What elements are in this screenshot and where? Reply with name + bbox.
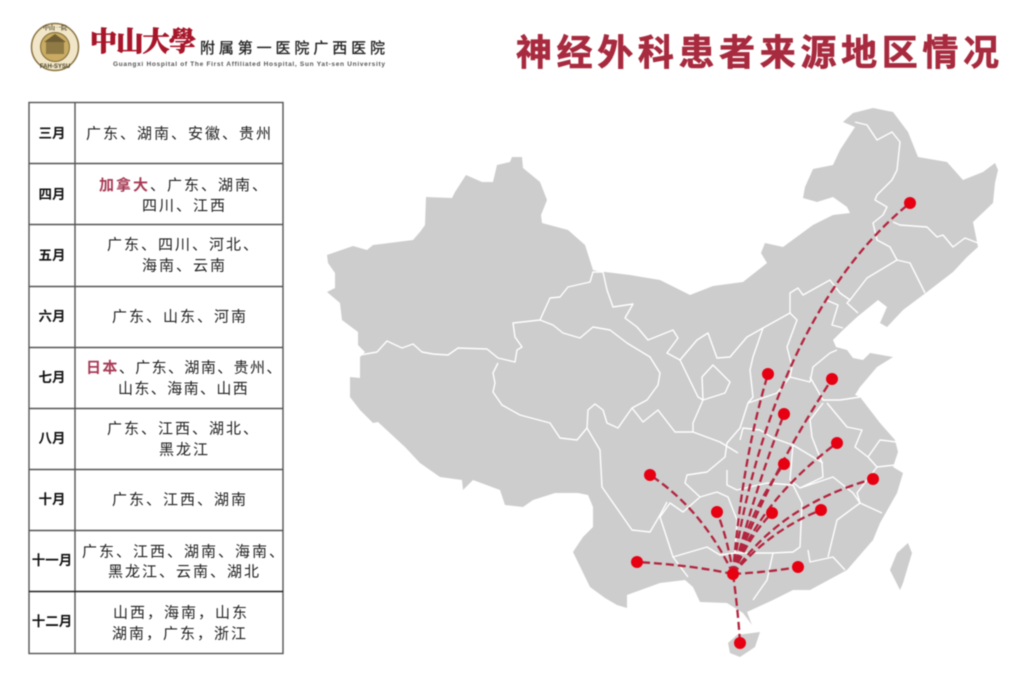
map of China [327,108,998,657]
row: October: 广东、江西、湖南 [112,492,248,508]
row: December: 十二月 [32,613,72,629]
row: October: 十月 [38,491,66,507]
row: April [38,176,269,214]
table: monthly patient origins [29,102,286,654]
row: May: 广东、四川、河北、 [107,236,260,254]
row: December [32,604,249,642]
Taiwan island [890,543,912,590]
row: April: 四川、江西 [142,198,227,214]
row: June [38,308,248,326]
row: November: 黑龙江、云南、湖北 [108,564,261,580]
patient route lines [637,203,910,643]
row: July: 七月 [38,370,66,385]
title: 神经外科患者来源地区情况 [516,32,999,73]
row: November: 十一月 [32,552,72,568]
row: March: 三月 [38,126,66,141]
university name: 中山大學 [90,27,196,57]
row: November [32,544,286,580]
hospital logo [32,24,385,70]
mainland silhouette [327,108,998,625]
icon: university seal: FAH-SYSU [40,64,70,70]
icon: university seal [32,24,78,70]
row: May: 五月 [38,248,66,263]
origin province markers [631,197,916,649]
row: December: 湖南，广东，浙江 [112,626,248,642]
row: May [38,236,260,274]
row: August [38,420,260,458]
hospital name: 附属第一医院广西医院 [200,39,385,57]
row: May: 海南、云南 [142,258,227,274]
row: August: 八月 [38,431,66,446]
row: July: 日本、广东、湖南、贵州、 [86,360,283,376]
row: March: 广东、湖南、安徽、贵州 [86,126,273,142]
row: April: 四月 [38,187,66,202]
hub marker: Guangxi [727,568,739,580]
row: August: 广东、江西、湖北、 [107,420,260,438]
hospital English name: Guangxi Hospital of The First Affiliated Hospital, Sun Yat-sen University [113,61,385,68]
row: July [38,360,283,398]
row: December: 山西，海南，山东 [113,604,249,622]
table grid [29,102,283,654]
row: June: 六月 [38,309,66,324]
row: July: 山东、海南、山西 [118,380,249,398]
icon: university seal: 中山一院 [43,24,67,32]
provincial borders [360,122,978,600]
Hainan island [728,632,760,657]
row: October [38,491,248,508]
row: November: 广东、江西、湖南、海南、 [82,544,286,560]
row: June: 广东、山东、河南 [112,308,248,326]
row: April: 加拿大、广东、湖南、 [99,176,269,194]
row: August: 黑龙江 [159,442,210,458]
